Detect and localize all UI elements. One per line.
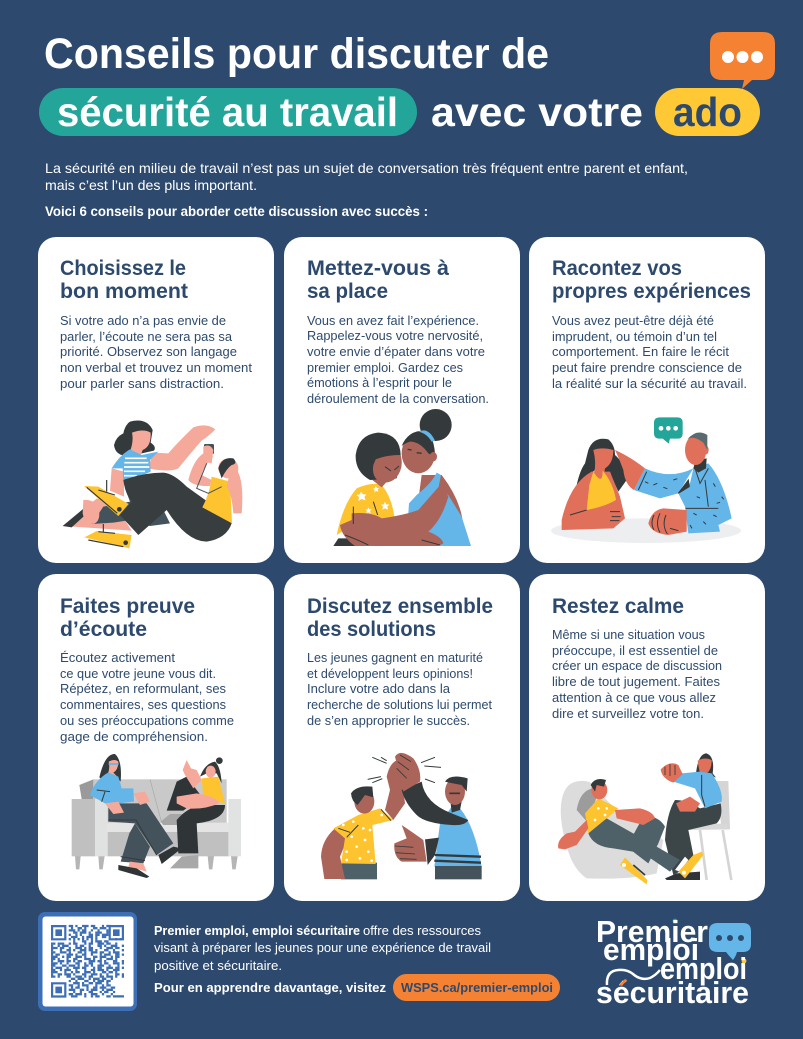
body text: la réalité sur la sécurité au travail. — [552, 376, 747, 391]
body text: émotions à l’esprit pour le — [307, 375, 452, 390]
body text — [307, 650, 492, 728]
illustration: two people talking on a sofa — [72, 754, 241, 878]
panel: Restez calme — [529, 574, 765, 901]
illustration: parent and teen with phone sitting on the floor — [63, 421, 242, 548]
footer text: visant à préparer les jeunes pour une expérience de travail — [154, 940, 491, 955]
body text: imprudent, ou témoin d’un tel — [552, 329, 717, 344]
body text: dire et surveillez votre ton. — [552, 706, 704, 721]
heading: d’écoute — [60, 618, 147, 641]
body text: parler, l’écoute ne sera pas sa — [60, 329, 233, 344]
logo: Premier emploi, emploi sécuritaire: emploi — [603, 932, 699, 967]
heading: Restez calme — [552, 595, 684, 618]
intro text: La sécurité en milieu de travail n’est pas un sujet de conversation très fréquent entre parent et enfant, — [45, 160, 688, 176]
title highlight: ado: ado — [673, 89, 742, 135]
footer text: positive et sécuritaire. — [154, 958, 282, 973]
body text: peut faire prendre conscience de — [552, 360, 742, 375]
body text — [307, 313, 489, 406]
body text — [60, 650, 234, 744]
body text: déroulement de la conversation. — [307, 391, 489, 406]
panel: Discutez ensemble des solutions — [284, 574, 520, 901]
panel: Racontez vos propres expériences — [529, 237, 765, 563]
body text: Répétez, en reformulant, ses — [60, 681, 226, 696]
footer text: Premier emploi, emploi sécuritaire — [154, 923, 360, 938]
title highlight: ado — [655, 88, 760, 136]
link button — [393, 974, 560, 1001]
body text: créer un espace de discussion — [552, 658, 722, 673]
QR code — [38, 912, 137, 1011]
body text: attention à ce que vous allez — [552, 690, 716, 705]
heading: Faites preuve — [60, 595, 195, 618]
body text: Vous avez peut-être déjà été — [552, 313, 714, 328]
intro text: mais c’est l’un des plus important. — [45, 177, 257, 193]
footer text — [154, 923, 491, 995]
body text: votre envie d’épater dans votre — [307, 344, 485, 359]
body text: recherche de solutions lui permet — [307, 697, 492, 712]
title: avec votre — [431, 89, 643, 135]
body text: Rappelez-vous votre nervosité, — [307, 328, 483, 343]
body text: ou ses préoccupations comme — [60, 713, 234, 728]
intro text — [45, 160, 688, 193]
body text: comportement. En faire le récit — [552, 344, 729, 359]
illustration: adult and teen talking at a table — [551, 417, 741, 543]
logo: Premier emploi, emploi sécuritaire — [596, 914, 751, 1010]
body text: de s’en approprier le succès. — [307, 713, 470, 728]
logo: Premier emploi, emploi sécuritaire: sécuritaire — [596, 975, 749, 1010]
body text: non verbal et trouvez un moment — [60, 360, 252, 375]
body text — [60, 313, 252, 391]
body text: premier emploi. Gardez ces — [307, 360, 463, 375]
body text: libre de tout jugement. Faites — [552, 674, 720, 689]
body text: priorité. Observez son langage — [60, 344, 237, 359]
heading: sa place — [307, 280, 388, 303]
heading: Discutez ensemble — [307, 595, 493, 618]
heading: Choisissez le — [60, 257, 186, 280]
logo: Premier emploi, emploi sécuritaire: Premier — [596, 914, 708, 949]
lead-in sentence: Voici 6 conseils pour aborder cette discussion avec succès : — [45, 203, 428, 219]
body text: Même si une situation vous — [552, 627, 705, 642]
heading — [307, 257, 449, 303]
panel: Choisissez le bon moment — [38, 237, 274, 563]
panel: Mettez-vous à sa place — [284, 237, 520, 563]
heading: Mettez-vous à — [307, 257, 449, 280]
illustration: mother hugging child — [333, 409, 471, 546]
body text: Si votre ado n’a pas envie de — [60, 313, 226, 328]
body text: gage de compréhension. — [60, 729, 208, 744]
footer text: Pour en apprendre davantage, visitez — [154, 980, 386, 995]
heading — [60, 595, 195, 641]
body text: Écoutez activement — [60, 650, 175, 665]
body text: pour parler sans distraction. — [60, 376, 224, 391]
heading — [307, 595, 493, 641]
heading: des solutions — [307, 618, 436, 641]
heading: Racontez vos — [552, 257, 682, 280]
panel: Faites preuve d'écoute — [38, 574, 274, 901]
body text: Inclure votre ado dans la — [307, 681, 451, 696]
body text — [552, 313, 747, 391]
heading: bon moment — [60, 280, 188, 303]
title: Conseils pour discuter de — [44, 30, 549, 78]
illustration: parent on a chair and teen on a beanbag — [558, 753, 731, 884]
logo: Premier emploi, emploi sécuritaire: emploi — [660, 951, 747, 986]
title highlight: sécurité au travail: sécurité au travail — [57, 89, 398, 135]
body text: préoccupe, il est essentiel de — [552, 643, 718, 658]
link button: WSPS.ca/premier-emploi — [401, 980, 553, 995]
illustration: teen and adult high five — [321, 753, 482, 879]
body text: et développent leurs opinions! — [307, 666, 473, 681]
body text: commentaires, ses questions — [60, 697, 226, 712]
title — [39, 30, 760, 136]
heading — [60, 257, 188, 303]
body text: Vous en avez fait l’expérience. — [307, 313, 479, 328]
body text: Les jeunes gagnent en maturité — [307, 650, 483, 665]
icon: orange speech bubble — [710, 32, 775, 89]
footer text: offre des ressources — [363, 923, 481, 938]
heading — [552, 257, 751, 303]
heading: propres expériences — [552, 280, 751, 303]
body text — [552, 627, 722, 721]
body text: ce que votre jeune vous dit. — [60, 666, 216, 681]
